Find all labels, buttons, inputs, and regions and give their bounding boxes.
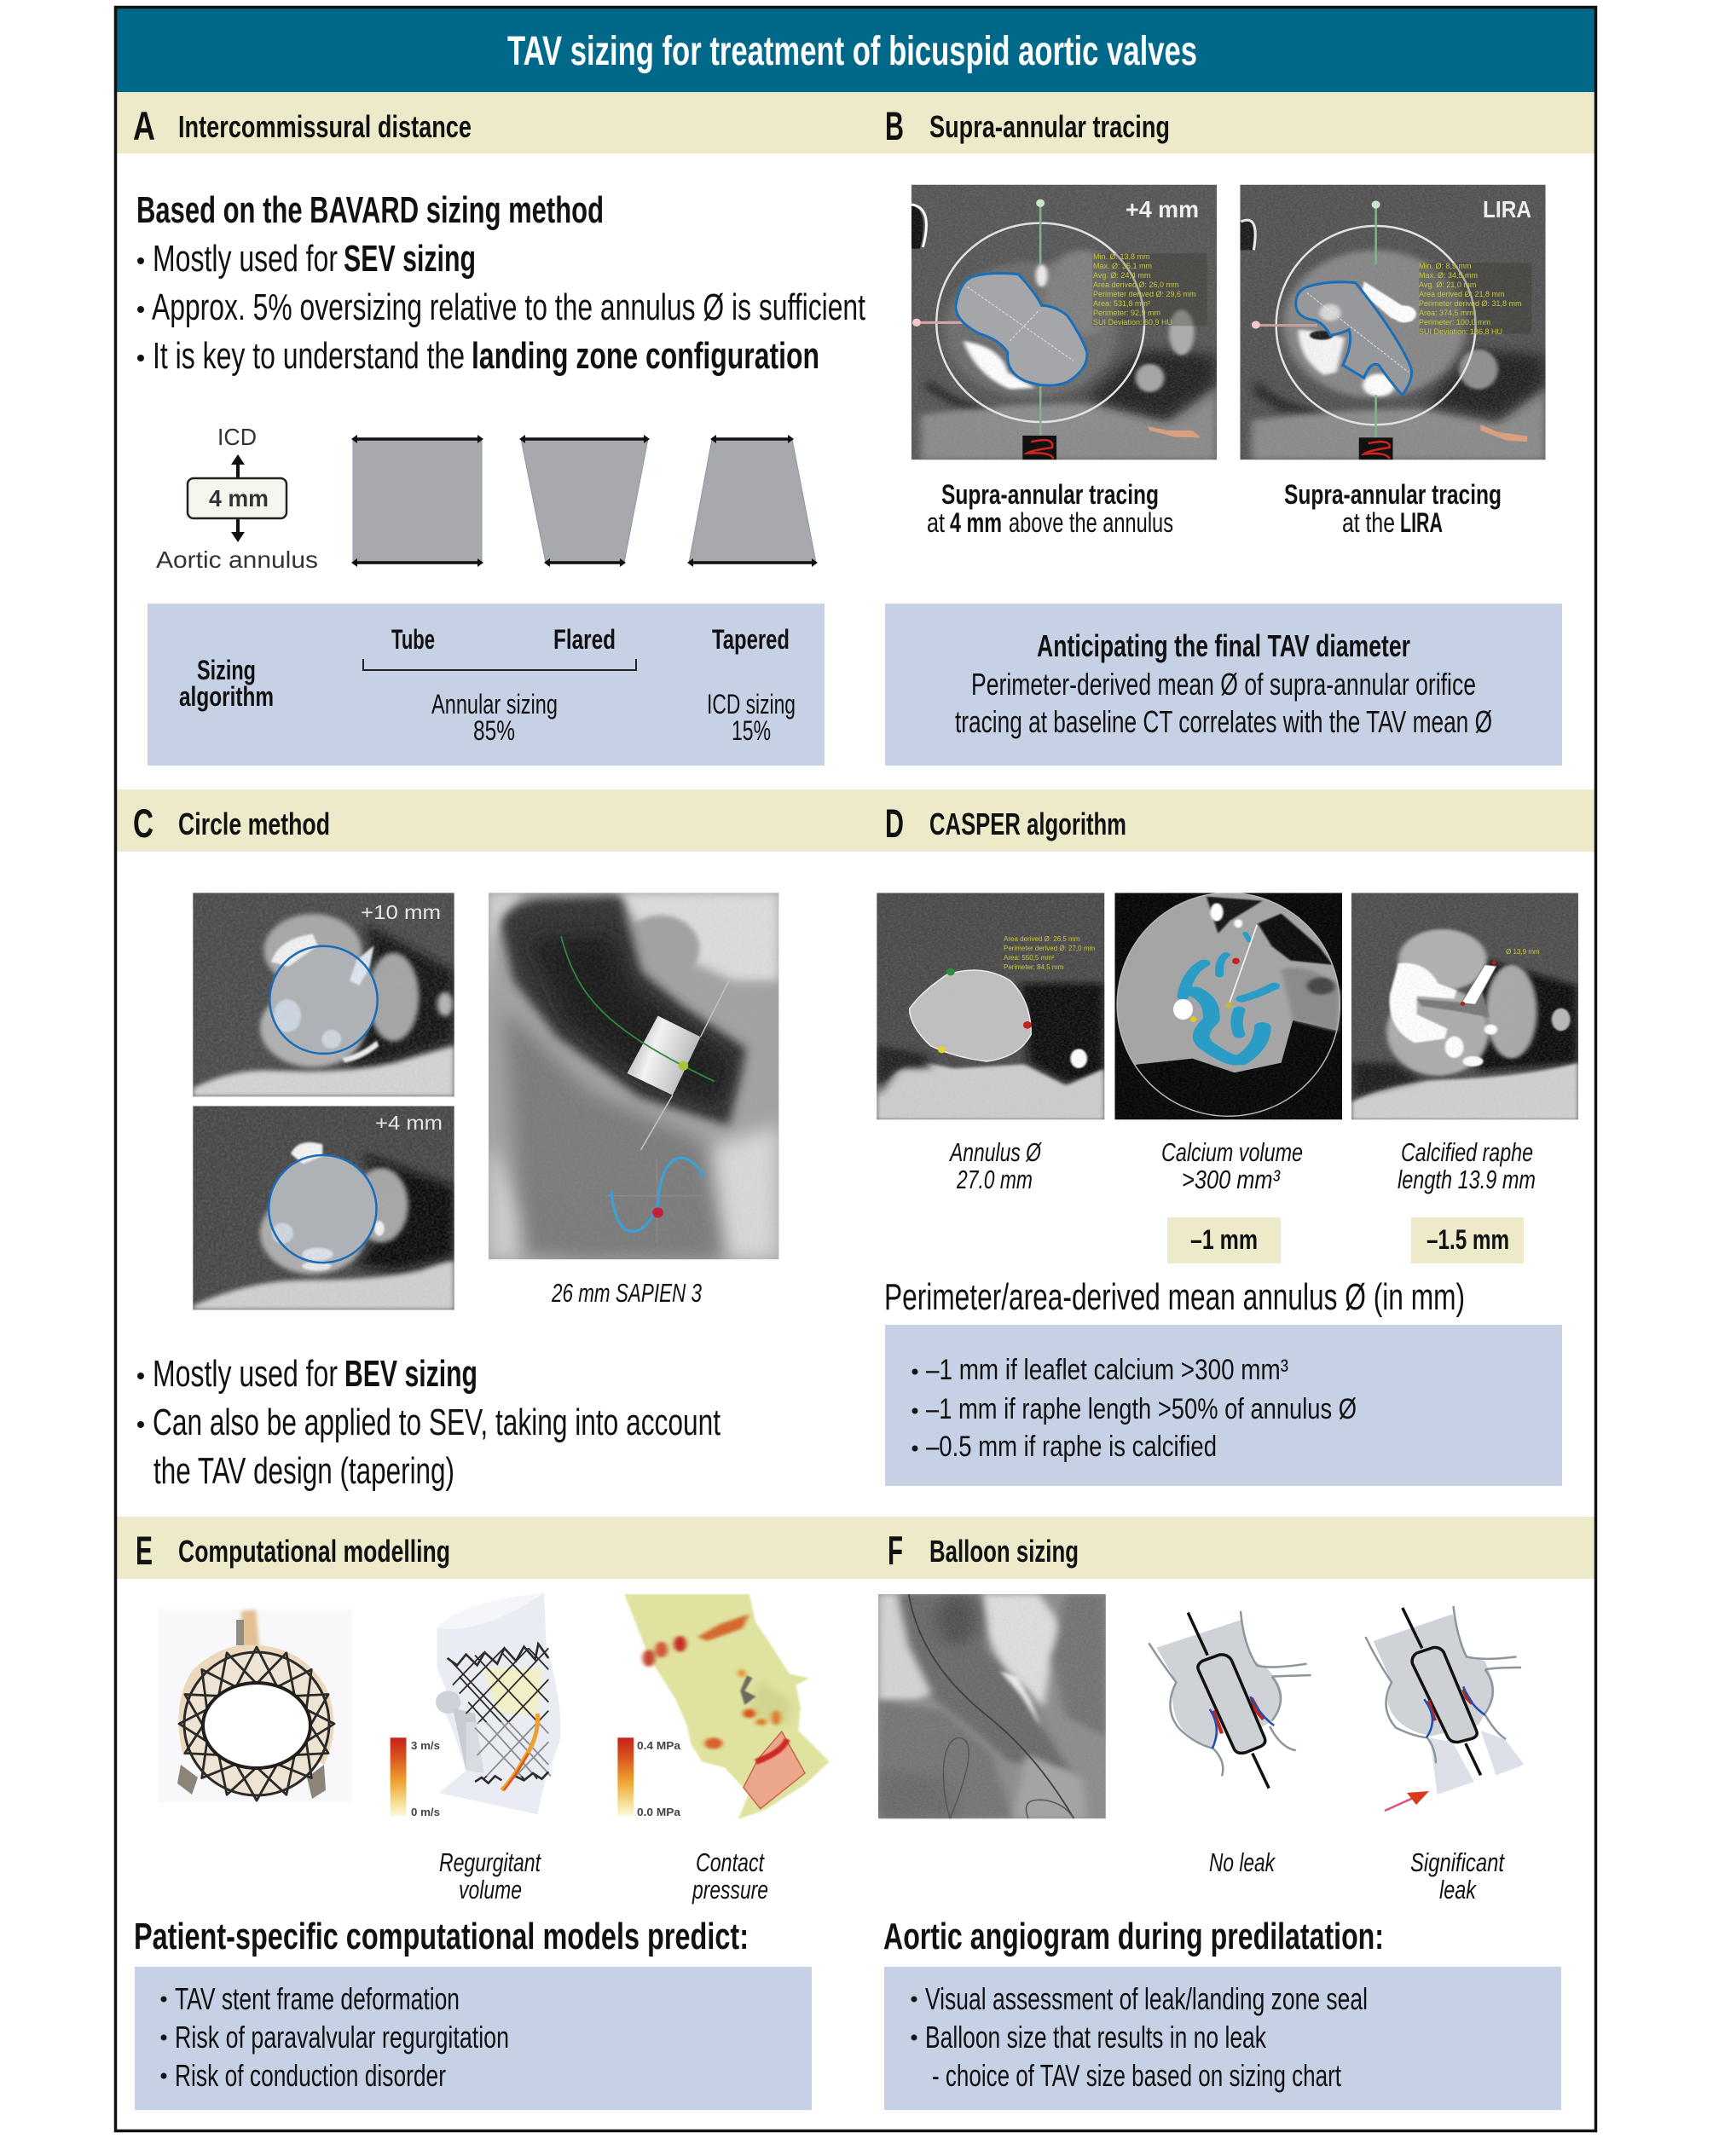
title bar: TAV sizing for treatment of bicuspid aortic valves bbox=[507, 29, 1197, 74]
ICD and annulus key bbox=[156, 424, 318, 573]
model predictions box bbox=[135, 1967, 812, 2110]
landing zone shapes: tube, flared, tapered bbox=[351, 435, 818, 567]
captions: annulus, calcium, raphe: Annulus Ø bbox=[949, 1137, 1042, 1167]
captions: regurgitant volume, contact pressure: volume bbox=[459, 1875, 522, 1905]
CT overlay measurements, +4 mm: Min. Ø: 13,8 mm bbox=[1093, 252, 1150, 261]
panel E header bbox=[116, 1517, 856, 1579]
sizing algorithm box: 15% bbox=[732, 715, 771, 746]
caption: tracing at 4 mm bbox=[927, 479, 1173, 538]
model predictions box: Risk of conduction disorder bbox=[175, 2058, 446, 2093]
panel A header: A bbox=[133, 103, 155, 148]
panel F header: F bbox=[888, 1528, 903, 1573]
sizing algorithm box: Flared bbox=[553, 624, 616, 655]
CT image: tracing at the LIRA bbox=[1240, 185, 1546, 460]
velocity legend labels bbox=[411, 1739, 440, 1818]
panel C bullet text: the TAV design (tapering) bbox=[153, 1450, 454, 1492]
panel C bullet text: Mostly used for bbox=[153, 1353, 338, 1395]
captions: no leak, significant leak bbox=[1209, 1847, 1505, 1905]
CT image label: +10 mm: +10 mm bbox=[361, 901, 441, 923]
angiogram assessment box: Visual assessment of leak/landing zone seal bbox=[925, 1981, 1368, 2016]
captions: annulus, calcium, raphe: Calcified raphe bbox=[1401, 1137, 1533, 1167]
panel A text block: Mostly used for bbox=[153, 238, 338, 280]
sizing algorithm box bbox=[148, 604, 825, 766]
CT overlay measurements, LIRA: Min. Ø: 8,9 mm bbox=[1419, 262, 1472, 270]
angiogram assessment box bbox=[884, 1967, 1561, 2110]
captions: annulus, calcium, raphe: Calcium volume bbox=[1161, 1137, 1303, 1167]
panel C header: Circle method bbox=[178, 806, 330, 841]
heading: mean annulus diameter: Perimeter/area-derived mean annulus Ø (in mm) bbox=[884, 1276, 1465, 1318]
caption: tracing at 4 mm: above the annulus bbox=[1009, 507, 1173, 538]
angiogram assessment box: - choice of TAV size based on sizing chart bbox=[932, 2058, 1341, 2093]
angiogram during predilatation bbox=[878, 1594, 1106, 1818]
caption: tracing at 4 mm: Supra-annular tracing bbox=[941, 479, 1159, 510]
sizing algorithm box: Tube bbox=[391, 624, 435, 655]
captions: regurgitant volume, contact pressure: Regurgitant bbox=[439, 1847, 541, 1877]
CT overlay measurements, LIRA: Area: 374,5 mm² bbox=[1419, 309, 1476, 317]
captions: annulus, calcium, raphe: >300 mm³ bbox=[1182, 1165, 1281, 1194]
panel D header: D bbox=[885, 801, 904, 846]
caption: tracing at 4 mm: 4 mm bbox=[950, 507, 1002, 538]
panel E header: Computational modelling bbox=[178, 1534, 450, 1569]
CT overlay measurements, +4 mm: Avg. Ø: 24,4 mm bbox=[1093, 271, 1150, 280]
CT overlay measurements, LIRA bbox=[1419, 196, 1531, 336]
panel A text block: Approx. 5% oversizing relative to the annulus Ø is sufficient bbox=[152, 286, 865, 328]
model: TAV stent frame bbox=[158, 1610, 352, 1802]
panel E header: E bbox=[136, 1528, 153, 1573]
CT overlay measurements, +4 mm: SUI Deviation: 60,9 HU bbox=[1093, 318, 1172, 327]
heading: aortic angiogram: Aortic angiogram during predilatation: bbox=[883, 1916, 1384, 1957]
panel F: balloon sizing bbox=[856, 1517, 1595, 2110]
CT image label: +4 mm: +4 mm bbox=[375, 1112, 443, 1134]
model: regurgitant flow in stent bbox=[391, 1592, 560, 1816]
fluoroscopy projection image with virtual valve bbox=[489, 893, 778, 1259]
panel A text block: It is key to understand the bbox=[153, 335, 465, 377]
caption: tracing at 4 mm: at bbox=[927, 507, 945, 538]
velocity legend labels: 0 m/s bbox=[411, 1806, 440, 1818]
captions: annulus, calcium, raphe: length 13.9 mm bbox=[1398, 1165, 1536, 1194]
panel C header bbox=[116, 789, 856, 852]
sizing algorithm box: Annular sizing bbox=[431, 689, 558, 720]
panel B header: B bbox=[885, 103, 904, 148]
CT overlay measurements, +4 mm: Perimeter derived Ø: 29,6 mm bbox=[1093, 290, 1196, 298]
pressure legend labels: 0.0 MPa bbox=[637, 1806, 681, 1818]
ICD and annulus key: ICD bbox=[217, 424, 257, 450]
anticipating final TAV diameter box: Anticipating the final TAV diameter bbox=[1037, 628, 1410, 663]
panel A text block: landing zone configuration bbox=[472, 335, 819, 377]
panel A header bbox=[116, 92, 856, 153]
captions: annulus, calcium, raphe bbox=[949, 1137, 1536, 1194]
diagram: no leak bbox=[1149, 1611, 1311, 1789]
CT overlay measurements, +4 mm: Area: 531,8 mm² bbox=[1093, 299, 1150, 308]
anticipating final TAV diameter box: tracing at baseline CT correlates with the TAV mean Ø bbox=[955, 704, 1492, 739]
CT overlay measurements, +4 mm: Perimeter: 92,9 mm bbox=[1093, 309, 1160, 317]
heading: patient-specific models: Patient-specific computational models predict: bbox=[134, 1916, 749, 1957]
ICD and annulus key: 4 mm bbox=[209, 485, 269, 512]
model predictions box: Risk of paravalvular regurgitation bbox=[175, 2020, 509, 2055]
CT image: calcified raphe bbox=[1351, 893, 1578, 1119]
model predictions box: TAV stent frame deformation bbox=[175, 1981, 460, 2016]
CT image: annulus bbox=[877, 893, 1104, 1119]
panel D header: CASPER algorithm bbox=[929, 806, 1126, 841]
panel C header: C bbox=[133, 801, 153, 846]
captions: no leak, significant leak: No leak bbox=[1209, 1847, 1276, 1877]
CASPER rules box: –1 mm if raphe length >50% of annulus Ø bbox=[926, 1393, 1357, 1425]
CT image: circle at +10 mm bbox=[193, 893, 454, 1096]
captions: no leak, significant leak: Significant bbox=[1410, 1847, 1505, 1877]
CT image: circle at +4 mm bbox=[193, 1106, 454, 1310]
CT overlay measurements, annulus bbox=[1004, 935, 1095, 971]
CT image: tracing at +4 mm bbox=[911, 185, 1217, 460]
CT overlay measurements, +4 mm: +4 mm bbox=[1126, 196, 1199, 223]
CASPER rules box bbox=[885, 1325, 1562, 1486]
adjustment tag: -1.5 mm bbox=[1411, 1217, 1524, 1263]
title bar bbox=[116, 8, 1595, 92]
CT overlay measurements, annulus: Perimeter derived Ø: 27,0 mm bbox=[1004, 945, 1095, 952]
CT overlay measurements, LIRA: Max. Ø: 34,5 mm bbox=[1419, 271, 1478, 280]
CT overlay measurements, +4 mm: Area derived Ø: 26,0 mm bbox=[1093, 280, 1179, 289]
panel B: supra-annular tracing bbox=[856, 92, 1595, 766]
anticipating final TAV diameter box: Perimeter-derived mean Ø of supra-annular orifice bbox=[971, 667, 1476, 702]
adjustment tag: -1.5 mm: –1.5 mm bbox=[1427, 1224, 1509, 1255]
CT overlay measurements, LIRA: Area derived Ø: 21,8 mm bbox=[1419, 290, 1505, 298]
sizing algorithm box: ICD sizing bbox=[707, 689, 796, 720]
panel D: CASPER algorithm bbox=[856, 789, 1595, 1486]
velocity legend labels: 3 m/s bbox=[411, 1739, 440, 1752]
CT overlay measurements, LIRA: Perimeter derived Ø: 31,8 mm bbox=[1419, 299, 1522, 308]
panel A text block: Based on the BAVARD sizing method bbox=[136, 189, 604, 231]
panel C bullet text: BEV sizing bbox=[344, 1353, 477, 1395]
CASPER rules box: –0.5 mm if raphe is calcified bbox=[926, 1431, 1217, 1463]
pressure legend labels bbox=[637, 1739, 681, 1818]
panel A: intercommissural distance bbox=[116, 92, 865, 766]
sizing algorithm box: 85% bbox=[473, 715, 515, 746]
anticipating final TAV diameter box bbox=[885, 604, 1562, 766]
panel C bullet text bbox=[137, 1353, 721, 1492]
diagram: significant leak bbox=[1365, 1606, 1525, 1795]
panel A text block bbox=[136, 189, 865, 377]
pressure legend labels: 0.4 MPa bbox=[637, 1739, 681, 1752]
CT overlay measurements, LIRA: SUI Deviation: 186,8 HU bbox=[1419, 327, 1502, 336]
panel D header bbox=[856, 789, 1595, 852]
CT overlay measurement, raphe: Ø 13,9 mm bbox=[1506, 948, 1540, 956]
adjustment tag: -1 mm bbox=[1167, 1217, 1281, 1263]
CT overlay measurements, annulus: Perimeter: 84,5 mm bbox=[1004, 963, 1064, 971]
CT overlay measurements, LIRA: Avg. Ø: 21,0 mm bbox=[1419, 280, 1476, 289]
sizing algorithm box: algorithm bbox=[179, 681, 274, 712]
panel C: circle method bbox=[116, 789, 856, 1492]
arrow: leak indicator bbox=[1385, 1791, 1429, 1811]
CT overlay measurements, annulus: Area: 550,5 mm² bbox=[1004, 954, 1055, 962]
panel F header bbox=[856, 1517, 1595, 1579]
panel A text block: SEV sizing bbox=[344, 238, 476, 280]
CT overlay measurements, annulus: Area derived Ø: 26,5 mm bbox=[1004, 935, 1080, 943]
sizing algorithm box: Tapered bbox=[712, 624, 790, 655]
captions: annulus, calcium, raphe: 27.0 mm bbox=[956, 1165, 1033, 1194]
CT image: calcium volume bbox=[1114, 893, 1342, 1119]
panel B header bbox=[856, 92, 1595, 153]
CT overlay measurements, LIRA: LIRA bbox=[1483, 196, 1531, 223]
caption: 26 mm SAPIEN 3: 26 mm SAPIEN 3 bbox=[551, 1278, 702, 1308]
model: contact pressure map bbox=[617, 1594, 830, 1819]
sizing algorithm box: Sizing bbox=[197, 655, 256, 685]
CT overlay measurements, +4 mm: Max. Ø: 35,1 mm bbox=[1093, 262, 1152, 270]
captions: regurgitant volume, contact pressure: Contact bbox=[696, 1847, 765, 1877]
caption: tracing at LIRA bbox=[1284, 479, 1502, 538]
panel E: computational modelling bbox=[116, 1517, 856, 2110]
caption: tracing at LIRA: at the bbox=[1342, 507, 1395, 538]
CASPER rules box: –1 mm if leaflet calcium >300 mm³ bbox=[926, 1354, 1288, 1386]
panel A header: Intercommissural distance bbox=[178, 109, 472, 144]
panel F header: Balloon sizing bbox=[929, 1534, 1079, 1569]
angiogram assessment box: Balloon size that results in no leak bbox=[925, 2020, 1267, 2055]
caption: tracing at LIRA: Supra-annular tracing bbox=[1284, 479, 1502, 510]
CT overlay measurements, +4 mm bbox=[1093, 196, 1199, 327]
adjustment tag: -1 mm: –1 mm bbox=[1190, 1224, 1258, 1255]
CT overlay measurements, LIRA: Perimeter: 100,0 mm bbox=[1419, 318, 1490, 327]
captions: no leak, significant leak: leak bbox=[1439, 1875, 1477, 1905]
panel B header: Supra-annular tracing bbox=[929, 109, 1170, 144]
captions: regurgitant volume, contact pressure bbox=[439, 1847, 768, 1905]
panel C bullet text: Can also be applied to SEV, taking into account bbox=[153, 1402, 721, 1443]
captions: regurgitant volume, contact pressure: pressure bbox=[692, 1875, 768, 1905]
caption: tracing at LIRA: LIRA bbox=[1400, 507, 1443, 538]
ICD and annulus key: Aortic annulus bbox=[156, 546, 318, 573]
